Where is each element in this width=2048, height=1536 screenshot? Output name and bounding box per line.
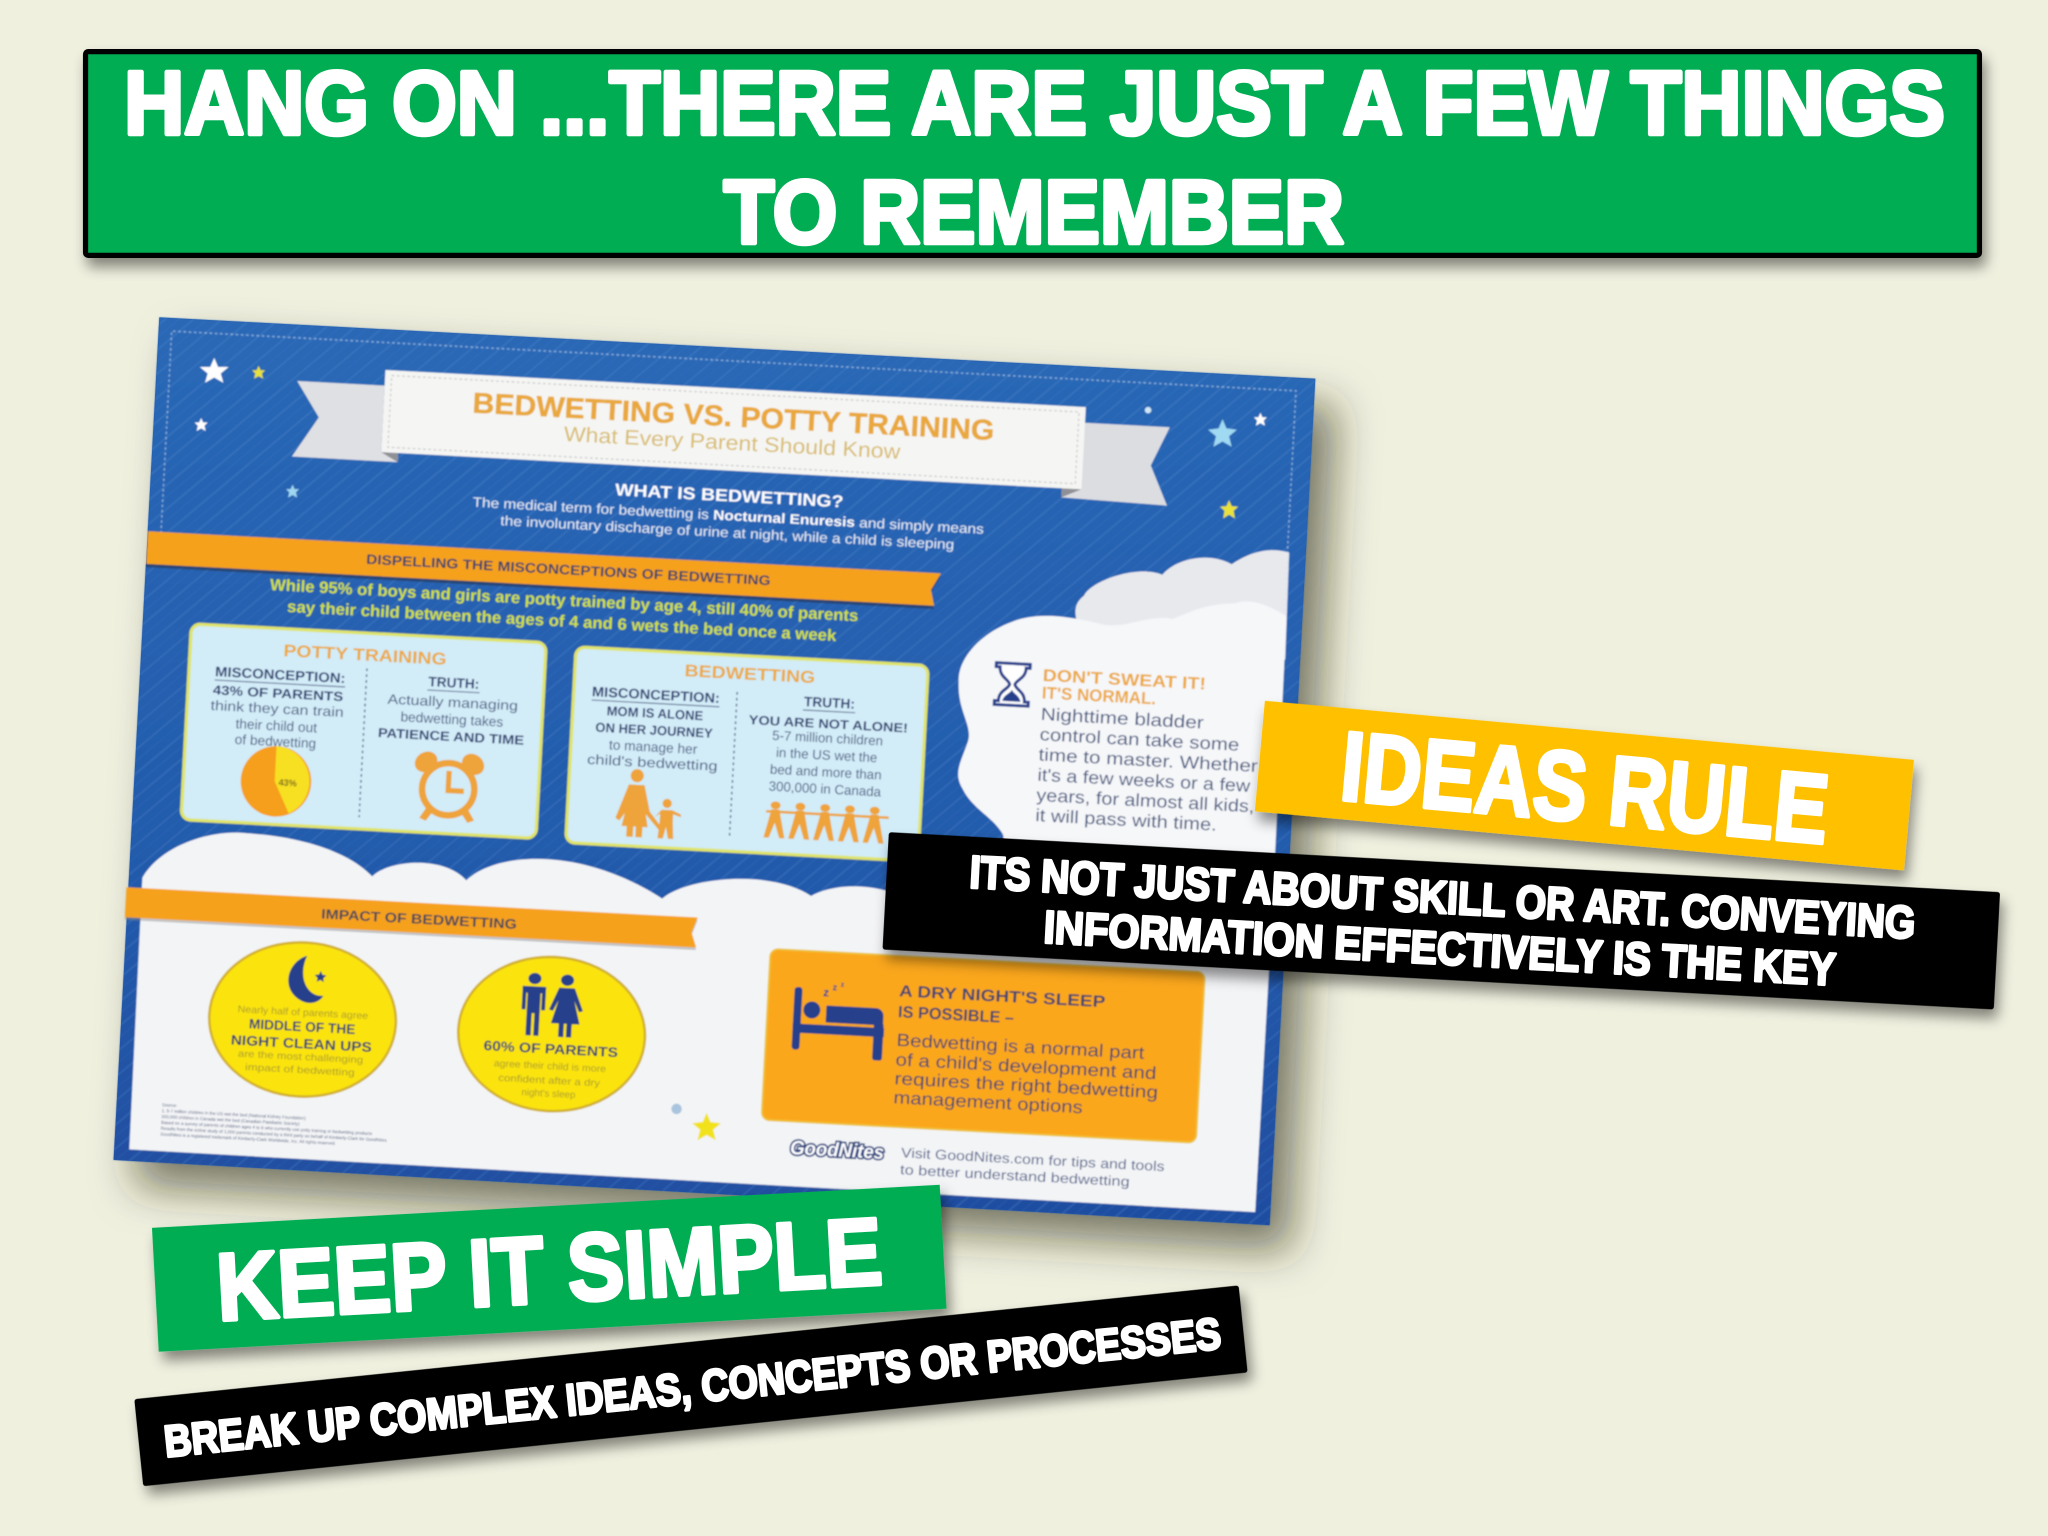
cloud: right back layer <box>1075 550 1289 660</box>
sources fine print: 1. 5-7 million children in the US wet the bed (National Kidney Foundation) <box>162 1108 306 1121</box>
icon: bed: z <box>823 986 830 999</box>
panel: bedwetting: MISCONCEPTION: <box>592 684 720 706</box>
cloud text: don't sweat it: it's a few weeks or a few <box>1037 765 1251 796</box>
circle: 60% of parents: confident after a dry <box>498 1073 600 1089</box>
label: break up complex ideas: BREAK UP COMPLEX IDEAS, CONCEPTS OR PROCESSES <box>162 1309 1223 1467</box>
title line 2: TO REMEMBER <box>724 162 1344 263</box>
sources fine print: GoodNites is a registered trademark of Kimberly-Clark Worldwide, Inc. All rights reserved. <box>160 1132 336 1146</box>
circle: middle of the night clean ups: MIDDLE OF THE <box>249 1016 356 1037</box>
panel: bedwetting: MOM IS ALONE <box>606 703 704 723</box>
cloud text: don't sweat it: years, for almost all kids, <box>1036 785 1255 816</box>
sources fine print: 300,000 children in Canada wet the bed (Canadian Paediatric Society) <box>161 1114 300 1126</box>
yellow statistic text <box>268 576 859 646</box>
yellow statistic text: While 95% of boys and girls are potty trained by age 4, still 40% of parents <box>270 576 859 625</box>
callout: a dry night's sleep: management options <box>893 1087 1083 1117</box>
sources fine print: Based on a survey of parents of children ages 4 to 6 who currently use potty training or bedwetting products <box>161 1120 373 1136</box>
cloud text: don't sweat it: IT'S NORMAL. <box>1041 683 1157 708</box>
yellow statistic text: say their child between the ages of 4 and 6 wets the bed once a week <box>287 598 838 645</box>
panel: bedwetting: child's bedwetting <box>587 752 718 774</box>
orange banner: dispelling the misconceptions: DISPELLING THE MISCONCEPTIONS OF BEDWETTING <box>366 552 771 588</box>
cloud: lower white area <box>129 833 1272 1212</box>
circle: 60% of parents: agree their child is more <box>493 1058 606 1075</box>
callout: a dry night's sleep: A DRY NIGHT'S SLEEP <box>899 982 1106 1011</box>
callout: a dry night's sleep: IS POSSIBLE – <box>898 1003 1014 1027</box>
cloud text: don't sweat it: control can take some <box>1039 724 1240 755</box>
icon: mother and child <box>614 768 683 839</box>
label: its not just about skill or art: INFORMATION EFFECTIVELY IS THE KEY <box>1043 902 1837 995</box>
circle: 60% of parents <box>454 952 649 1116</box>
label: its not just about skill or art: ITS NOT JUST ABOUT SKILL OR ART. CONVEYING <box>968 847 1917 948</box>
icon: alarm clock <box>408 746 489 824</box>
sources fine print: Source: <box>162 1102 177 1108</box>
subtitle text: What Every Parent Should Know <box>563 423 902 464</box>
icon: bed <box>791 978 887 1061</box>
poster content <box>113 330 1296 1196</box>
panel: bedwetting <box>566 647 928 861</box>
circle: middle of the night clean ups: Nearly half of parents agree <box>237 1004 368 1022</box>
circle: middle of the night clean ups <box>205 938 400 1101</box>
panel: potty training: Actually managing <box>387 692 518 713</box>
circle: middle of the night clean ups: NIGHT CLEAN UPS <box>230 1032 372 1055</box>
visit GoodNites text: to better understand bedwetting <box>900 1162 1130 1189</box>
orange banner: dispelling the misconceptions <box>146 531 941 609</box>
label: ideas rule: IDEAS RULE <box>1337 711 1833 864</box>
what is bedwetting text: The medical term for bedwetting is Nocturnal Enuresis and simply means <box>472 495 984 537</box>
GoodNites logo: GoodNites <box>790 1137 885 1164</box>
panel: bedwetting: to manage her <box>609 737 698 757</box>
label: its not just about skill or art <box>883 832 2000 1009</box>
panel: potty training: of bedwetting <box>234 732 317 751</box>
panel: bedwetting: 300,000 in Canada <box>768 779 882 800</box>
title bar <box>86 52 1979 263</box>
orange banner: impact of bedwetting: IMPACT OF BEDWETTING <box>321 906 517 932</box>
cloud text: don't sweat it: it will pass with time. <box>1035 805 1217 835</box>
panel: potty training <box>181 624 546 838</box>
panel: bedwetting: BEDWETTING <box>684 661 816 687</box>
orange banner: impact of bedwetting <box>125 887 698 950</box>
panel: potty training: their child out <box>235 716 318 736</box>
visit GoodNites text: Visit GoodNites.com for tips and tools <box>901 1145 1165 1174</box>
callout: a dry night's sleep <box>762 949 1205 1143</box>
panel: bedwetting: bed and more than <box>770 762 882 783</box>
cloud text: don't sweat it: DON'T SWEAT IT! <box>1042 666 1206 693</box>
pie chart: 43%: 43% <box>278 777 297 788</box>
panel: bedwetting: TRUTH: <box>804 694 855 712</box>
cloud text: don't sweat it: Nighttime bladder <box>1040 704 1204 733</box>
sources fine print <box>160 1102 389 1149</box>
visit GoodNites text <box>900 1145 1165 1191</box>
panel: potty training: TRUTH: <box>428 674 480 692</box>
icon: row of children <box>763 801 889 844</box>
ribbon banner <box>292 365 1172 506</box>
pie chart: 43% <box>239 744 313 818</box>
what is bedwetting text: WHAT IS BEDWETTING? <box>615 480 844 511</box>
label: keep it simple: KEEP IT SIMPLE <box>214 1199 885 1341</box>
title line 1: HANG ON ...THERE ARE JUST A FEW THINGS <box>124 53 1945 154</box>
panel: potty training: think they can train <box>210 698 344 720</box>
what is bedwetting text: the involuntary discharge of urine at night, while a child is sleeping <box>500 513 955 552</box>
panel: bedwetting: 5-7 million children <box>772 728 883 749</box>
panel: bedwetting: YOU ARE NOT ALONE! <box>748 712 908 736</box>
panel: bedwetting: ON HER JOURNEY <box>595 720 713 741</box>
icon: bed: z <box>840 981 845 989</box>
icon: man and woman <box>520 972 585 1038</box>
poster: bedwetting vs potty training infographic <box>113 317 1315 1225</box>
callout: a dry night's sleep: Bedwetting is a normal part <box>896 1030 1145 1063</box>
callout: a dry night's sleep: requires the right bedwetting <box>894 1068 1159 1102</box>
circle: middle of the night clean ups: impact of bedwetting <box>245 1062 355 1079</box>
cloud text: don't sweat it: time to master. Whether <box>1038 744 1258 776</box>
what is bedwetting text <box>471 473 986 554</box>
panel: potty training: bedwetting takes <box>400 709 504 730</box>
cloud: right front layer <box>958 601 1287 914</box>
cloud text: don't sweat it <box>988 663 1263 837</box>
icon: hourglass <box>994 663 1030 706</box>
panel: potty training: MISCONCEPTION: <box>215 664 346 686</box>
circle: 60% of parents: 60% OF PARENTS <box>483 1038 618 1060</box>
circle: middle of the night clean ups: are the most challenging <box>238 1049 363 1066</box>
title text: BEDWETTING VS. POTTY TRAINING <box>472 388 995 447</box>
poster stars <box>195 358 1267 1140</box>
panel: potty training: POTTY TRAINING <box>283 641 447 669</box>
panel: potty training: PATIENCE AND TIME <box>378 725 525 748</box>
circle: 60% of parents: night's sleep <box>521 1087 576 1101</box>
icon: bed: z <box>832 982 838 992</box>
panel: potty training: 43% OF PARENTS <box>212 682 344 704</box>
callout: a dry night's sleep: of a child's development and <box>895 1049 1157 1083</box>
icon: moon and star <box>287 955 327 1004</box>
panel: bedwetting: in the US wet the <box>776 745 878 765</box>
sources fine print: Results from the online study of 1,000 parents conducted by a third party on behalf of Kimberly-Clark for GoodNites <box>161 1126 388 1143</box>
